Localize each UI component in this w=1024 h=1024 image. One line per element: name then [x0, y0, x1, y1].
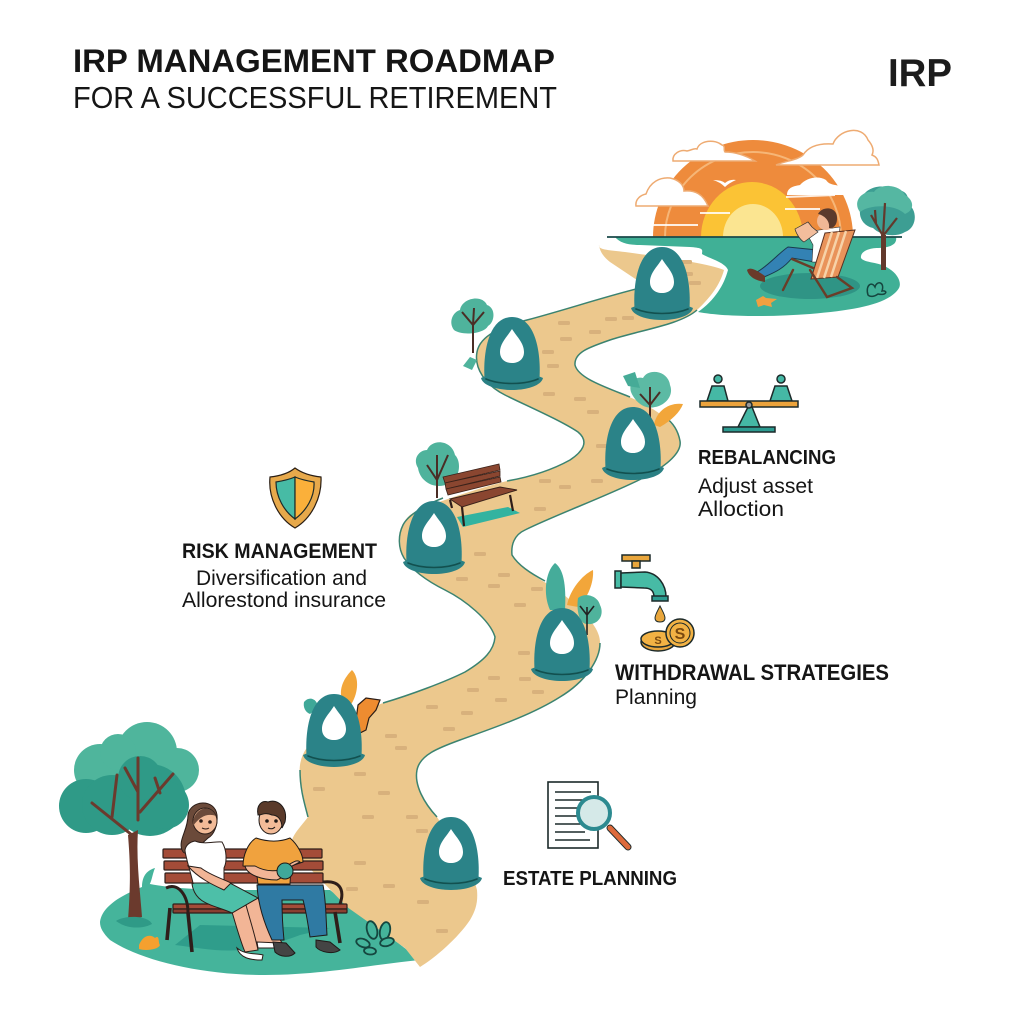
- tree near marker 4: [416, 442, 459, 498]
- label: withdrawal strategies: [615, 660, 889, 709]
- tree base leaves: [116, 917, 152, 928]
- marker 7: [420, 817, 482, 890]
- marker 5: [531, 608, 593, 681]
- tree near marker 3: [623, 372, 683, 427]
- label: withdrawal strategies: WITHDRAWAL STRATEGIES: [615, 660, 889, 685]
- cloud 4: [787, 178, 852, 195]
- winding path: [291, 245, 724, 967]
- bench shadow: [175, 925, 330, 951]
- woman: [181, 803, 282, 960]
- marker 1: [631, 247, 693, 320]
- man: [243, 801, 340, 956]
- chair shadow: [760, 273, 860, 299]
- label: rebalancing: Alloction: [698, 498, 784, 521]
- foliage near marker 5: [546, 563, 602, 635]
- park bench: small: [443, 464, 520, 527]
- marker 2: [481, 317, 543, 390]
- icon: document and magnifier: [548, 782, 628, 848]
- island: sunset lake: [607, 130, 915, 316]
- lake and grass: [615, 237, 900, 316]
- icon: balance scale: [700, 375, 798, 432]
- tree: right: [857, 186, 915, 270]
- icon: faucet and coins: S: [654, 635, 662, 647]
- label: risk management: Allorestond insurance: [182, 589, 386, 612]
- icon: fallen leaf: [756, 296, 777, 307]
- path edges: [300, 288, 697, 817]
- marker 3: [602, 407, 664, 480]
- big tree: [59, 722, 199, 928]
- label: risk management: [182, 539, 386, 612]
- cloud 1: [673, 141, 755, 161]
- title: [73, 43, 557, 115]
- icon: sprout: [867, 283, 886, 296]
- label: estate planning: ESTATE PLANNING: [503, 867, 677, 890]
- title: IRP MANAGEMENT ROADMAP: [73, 43, 555, 79]
- tree near marker 2: [451, 299, 494, 370]
- title: FOR A SUCCESSFUL RETIREMENT: [73, 80, 557, 115]
- label: rebalancing: Adjust asset: [698, 475, 813, 498]
- sun: [652, 140, 853, 237]
- label: rebalancing: [698, 447, 836, 521]
- marker 6: [303, 694, 365, 767]
- icon: orange flower: [139, 936, 160, 950]
- bench: [163, 849, 347, 952]
- foliage near marker 6: [304, 670, 380, 733]
- couple on bench: [163, 801, 347, 960]
- icon: faucet and coins: S: [675, 626, 686, 643]
- label: rebalancing: REBALANCING: [698, 447, 836, 469]
- cloud 3: [636, 178, 708, 206]
- label: risk management: Diversification and: [196, 567, 367, 590]
- marker 4: [403, 501, 465, 574]
- icon: leaves: [355, 920, 395, 955]
- grass tuft: [142, 868, 155, 887]
- man in chair: [747, 208, 855, 297]
- label: withdrawal strategies: Planning: [615, 686, 697, 709]
- island: park grass: [100, 884, 420, 975]
- horizon line: [607, 236, 902, 238]
- path bricks: [313, 253, 701, 933]
- icon: shield: [270, 468, 321, 528]
- animal: [356, 698, 380, 733]
- icon: faucet and coins: [615, 555, 694, 651]
- cloud 2: [776, 130, 879, 165]
- logo text: IRP: IRP: [888, 52, 952, 95]
- label: risk management: RISK MANAGEMENT: [182, 539, 377, 563]
